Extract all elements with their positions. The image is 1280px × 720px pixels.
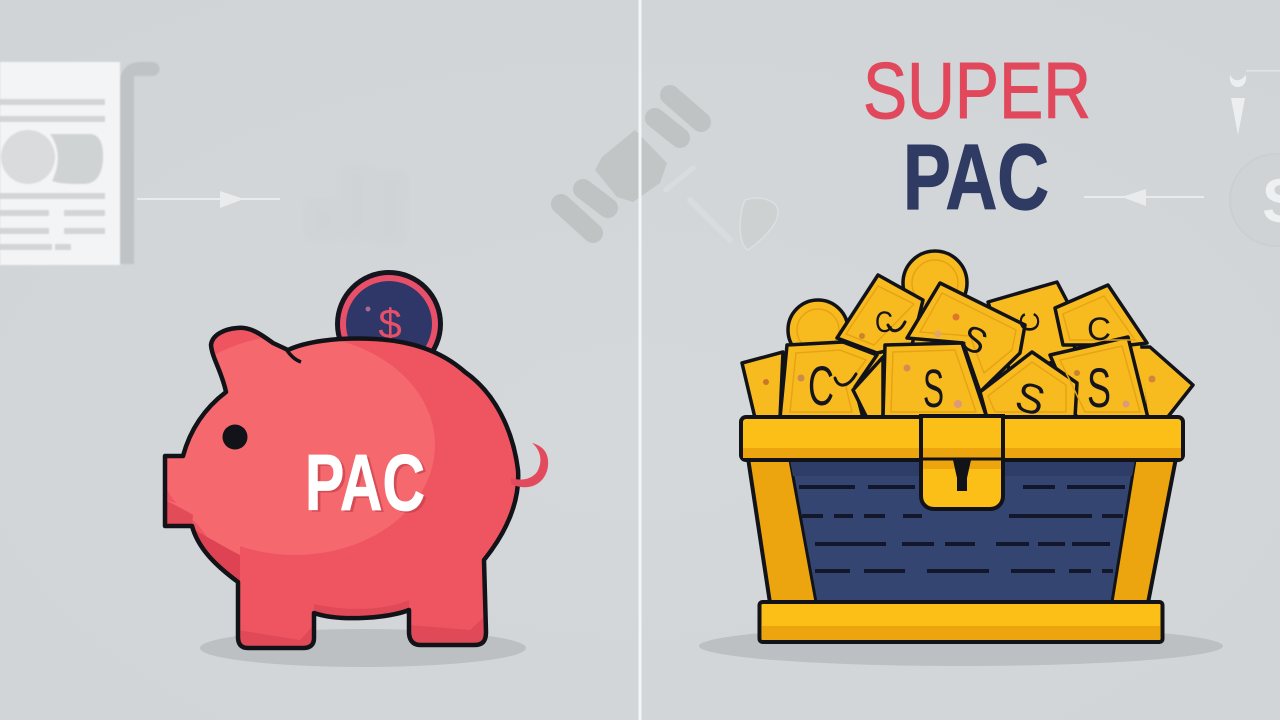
divider <box>638 0 642 720</box>
dollar-like marks on coins: C <box>1087 311 1111 347</box>
treasure chest <box>741 416 1183 642</box>
hook strokes on coin marks <box>835 322 905 385</box>
title: SUPER PAC <box>863 46 1091 229</box>
faded icon: newspaper document <box>0 62 160 265</box>
pig label: PAC: PAC <box>308 440 428 529</box>
faded icon: ghost building <box>305 165 407 245</box>
dollar-like marks on coins: C <box>808 354 834 417</box>
coin speckles <box>763 314 1156 408</box>
dollar-like marks on coins <box>808 306 1111 425</box>
title: SUPER PAC: PAC <box>903 125 1049 229</box>
coin entering piggy bank <box>335 270 443 378</box>
dollar-like marks on coins: S <box>1011 372 1050 425</box>
chest lock hasp <box>921 416 1003 509</box>
pig tail <box>511 443 548 487</box>
chest planks <box>799 487 1125 571</box>
chest base <box>760 602 1162 642</box>
coin entering piggy bank: $ <box>378 300 402 347</box>
treasure chest shadow <box>699 626 1223 666</box>
pig eye <box>222 424 248 450</box>
pig label: PAC: PAC <box>305 438 425 527</box>
piggy bank <box>155 328 548 648</box>
faded icon: gavel <box>561 95 778 250</box>
dollar-like marks on coins: C <box>875 306 893 339</box>
chest body <box>748 458 1176 603</box>
faded icon: dollar coin on right edge <box>1230 70 1280 246</box>
title: SUPER PAC: SUPER <box>863 46 1091 135</box>
chest lid <box>741 417 1183 460</box>
pile of gold coins and bills <box>742 251 1193 418</box>
dollar-like marks on coins: S <box>923 359 944 419</box>
piggy bank shadow <box>200 629 526 667</box>
dollar-like marks on coins: C <box>1014 312 1045 332</box>
arrow: right flow pointing left <box>1084 189 1204 206</box>
dollar-like marks on coins: S <box>955 316 994 363</box>
dollar-like marks on coins: S <box>1087 356 1111 419</box>
arrow: left flow pointing right <box>137 191 280 208</box>
